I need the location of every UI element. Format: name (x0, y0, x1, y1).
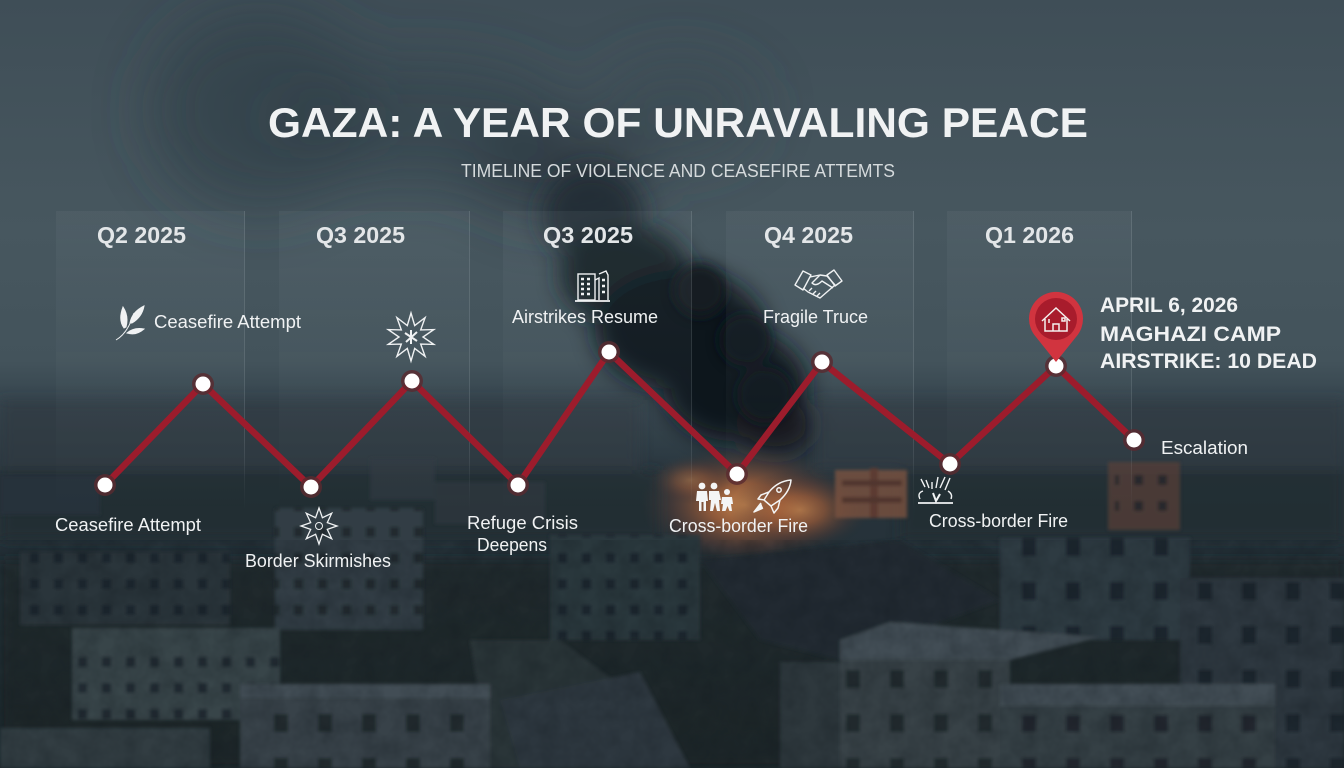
quarter heading: Q1 2026: Q1 2026 (985, 222, 1074, 248)
callout: Maghazi Camp airstrike: APRIL 6, 2026 (1100, 294, 1238, 317)
panel: Q3 2025 column (279, 211, 470, 511)
timeline nodes (94, 341, 1145, 498)
label: Refuge Crisis Deepens (467, 513, 578, 555)
quarter heading: Q3 2025: Q3 2025 (316, 222, 405, 248)
panel: Q1 2026 column (947, 211, 1132, 511)
icon: ground explosion (918, 477, 953, 503)
callout: Maghazi Camp airstrike: AIRSTRIKE: 10 DEAD (1100, 350, 1317, 373)
label: Cross-border Fire right: Cross-border Fire (929, 511, 1068, 531)
panel: Q4 2025 column (726, 211, 914, 511)
icon: explosion burst upper (388, 313, 434, 361)
icon: rocket (754, 480, 791, 513)
quarter heading: second Q3 2025: Q3 2025 (543, 222, 633, 248)
icon: explosion burst lower (301, 508, 337, 544)
timeline zigzag line (105, 352, 1134, 487)
callout: Maghazi Camp airstrike: MAGHAZI CAMP (1100, 323, 1281, 346)
label: Airstrikes Resume: Airstrikes Resume (512, 307, 658, 327)
icon: location pin with house (1029, 292, 1083, 362)
panel: Q2 2025 column (56, 211, 245, 511)
label: Cross-border Fire centre: Cross-border Fire (669, 516, 808, 536)
panel: second Q3 2025 column (503, 211, 692, 511)
quarter heading: Q2 2025: Q2 2025 (97, 222, 186, 248)
icon: damaged buildings (575, 271, 610, 301)
icon: olive branch (116, 306, 144, 340)
callout: Maghazi Camp airstrike (1100, 294, 1317, 373)
icon: family (696, 483, 733, 511)
label: Border Skirmishes: Border Skirmishes (245, 551, 391, 571)
label: Ceasefire Attempt upper: Ceasefire Attempt (154, 312, 301, 332)
icon: handshake (795, 270, 842, 298)
subtitle: TIMELINE OF VIOLENCE AND CEASEFIRE ATTEMTS (461, 161, 895, 181)
label: Escalation: Escalation (1161, 438, 1248, 458)
label: Refuge Crisis Deepens: Deepens (477, 535, 547, 555)
label: Refuge Crisis Deepens: Refuge Crisis (467, 513, 578, 533)
label: Ceasefire Attempt lower: Ceasefire Attempt (55, 515, 201, 535)
title: GAZA: A YEAR OF UNRAVALING PEACE (268, 99, 1088, 146)
quarter heading: Q4 2025: Q4 2025 (764, 222, 853, 248)
label: Fragile Truce: Fragile Truce (763, 307, 868, 327)
